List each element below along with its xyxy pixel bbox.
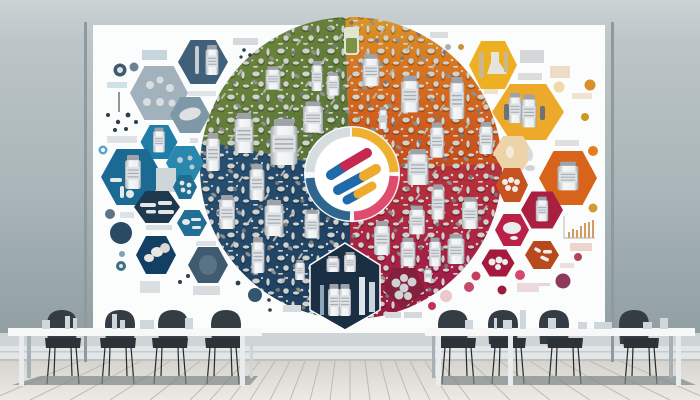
capsule: navy and yellow (347, 186, 372, 200)
hexagon: orange jar (539, 151, 597, 205)
table shadow: right (436, 376, 696, 385)
hexagon: anatomy slate (188, 247, 228, 283)
wooden floor (0, 361, 700, 400)
center badge (304, 126, 400, 222)
pill texture overlay (200, 20, 498, 318)
baseboard (0, 333, 700, 362)
globe icon (110, 222, 132, 244)
hexagon: slate bottle (178, 40, 228, 84)
panel: pill wheel (200, 17, 502, 318)
bottles: crimson quadrant (374, 184, 478, 282)
display stand poles (84, 22, 614, 362)
hexagon: light teal (166, 146, 204, 180)
small icons: left side (98, 62, 262, 302)
chairs: left group (45, 310, 241, 384)
crimson tablets pile (383, 268, 425, 309)
chairs: right group (438, 310, 659, 384)
hexagon: gray panel (156, 168, 176, 192)
badge ring (310, 132, 394, 216)
green quadrant (202, 17, 349, 161)
small icons: right side (428, 44, 598, 310)
molecule diagrams (106, 48, 272, 312)
hexagon: deep crimson tablets (482, 250, 514, 276)
bottles: blue quadrant (219, 164, 320, 280)
hexagon: rust tablets (496, 168, 528, 202)
hexagon: tan pills (493, 136, 535, 171)
hexagon: navy tablets (136, 236, 176, 274)
blue quadrant (200, 140, 350, 316)
presentation board (93, 25, 605, 333)
hexagon: teal bottle (140, 125, 178, 159)
hexagon: rust pills (525, 241, 559, 269)
capsule: red and blue (331, 153, 367, 175)
table shadow: left (12, 376, 258, 385)
info text blocks: left side (107, 38, 258, 295)
hexagon: crimson tablets (495, 214, 529, 246)
hexagon: large blue bottle (101, 149, 163, 205)
hexagon: gray tablet (170, 97, 210, 133)
table: left (8, 314, 262, 386)
hexagon: teal tablets (173, 175, 197, 199)
hexagon: gold flasks (469, 41, 517, 89)
green jar at top (344, 27, 359, 55)
bar chart (564, 216, 595, 238)
hexagon: teal pills (177, 210, 207, 236)
table: right (425, 310, 695, 386)
hexagon: dark tablets (134, 191, 180, 223)
info text blocks: right side (283, 32, 592, 318)
hexagon: large gold bottles (492, 84, 564, 140)
panel: bottom center hexagon (310, 243, 380, 330)
hexagon: gray tablets (130, 66, 188, 120)
capsule: blue and yellow (338, 169, 376, 190)
bottles: green quadrant (206, 61, 340, 171)
hexagon: crimson bottle (521, 192, 563, 228)
bottles: orange quadrant (362, 54, 493, 185)
orange quadrant (346, 17, 500, 168)
crimson quadrant (350, 163, 502, 318)
pill texture (200, 17, 502, 318)
